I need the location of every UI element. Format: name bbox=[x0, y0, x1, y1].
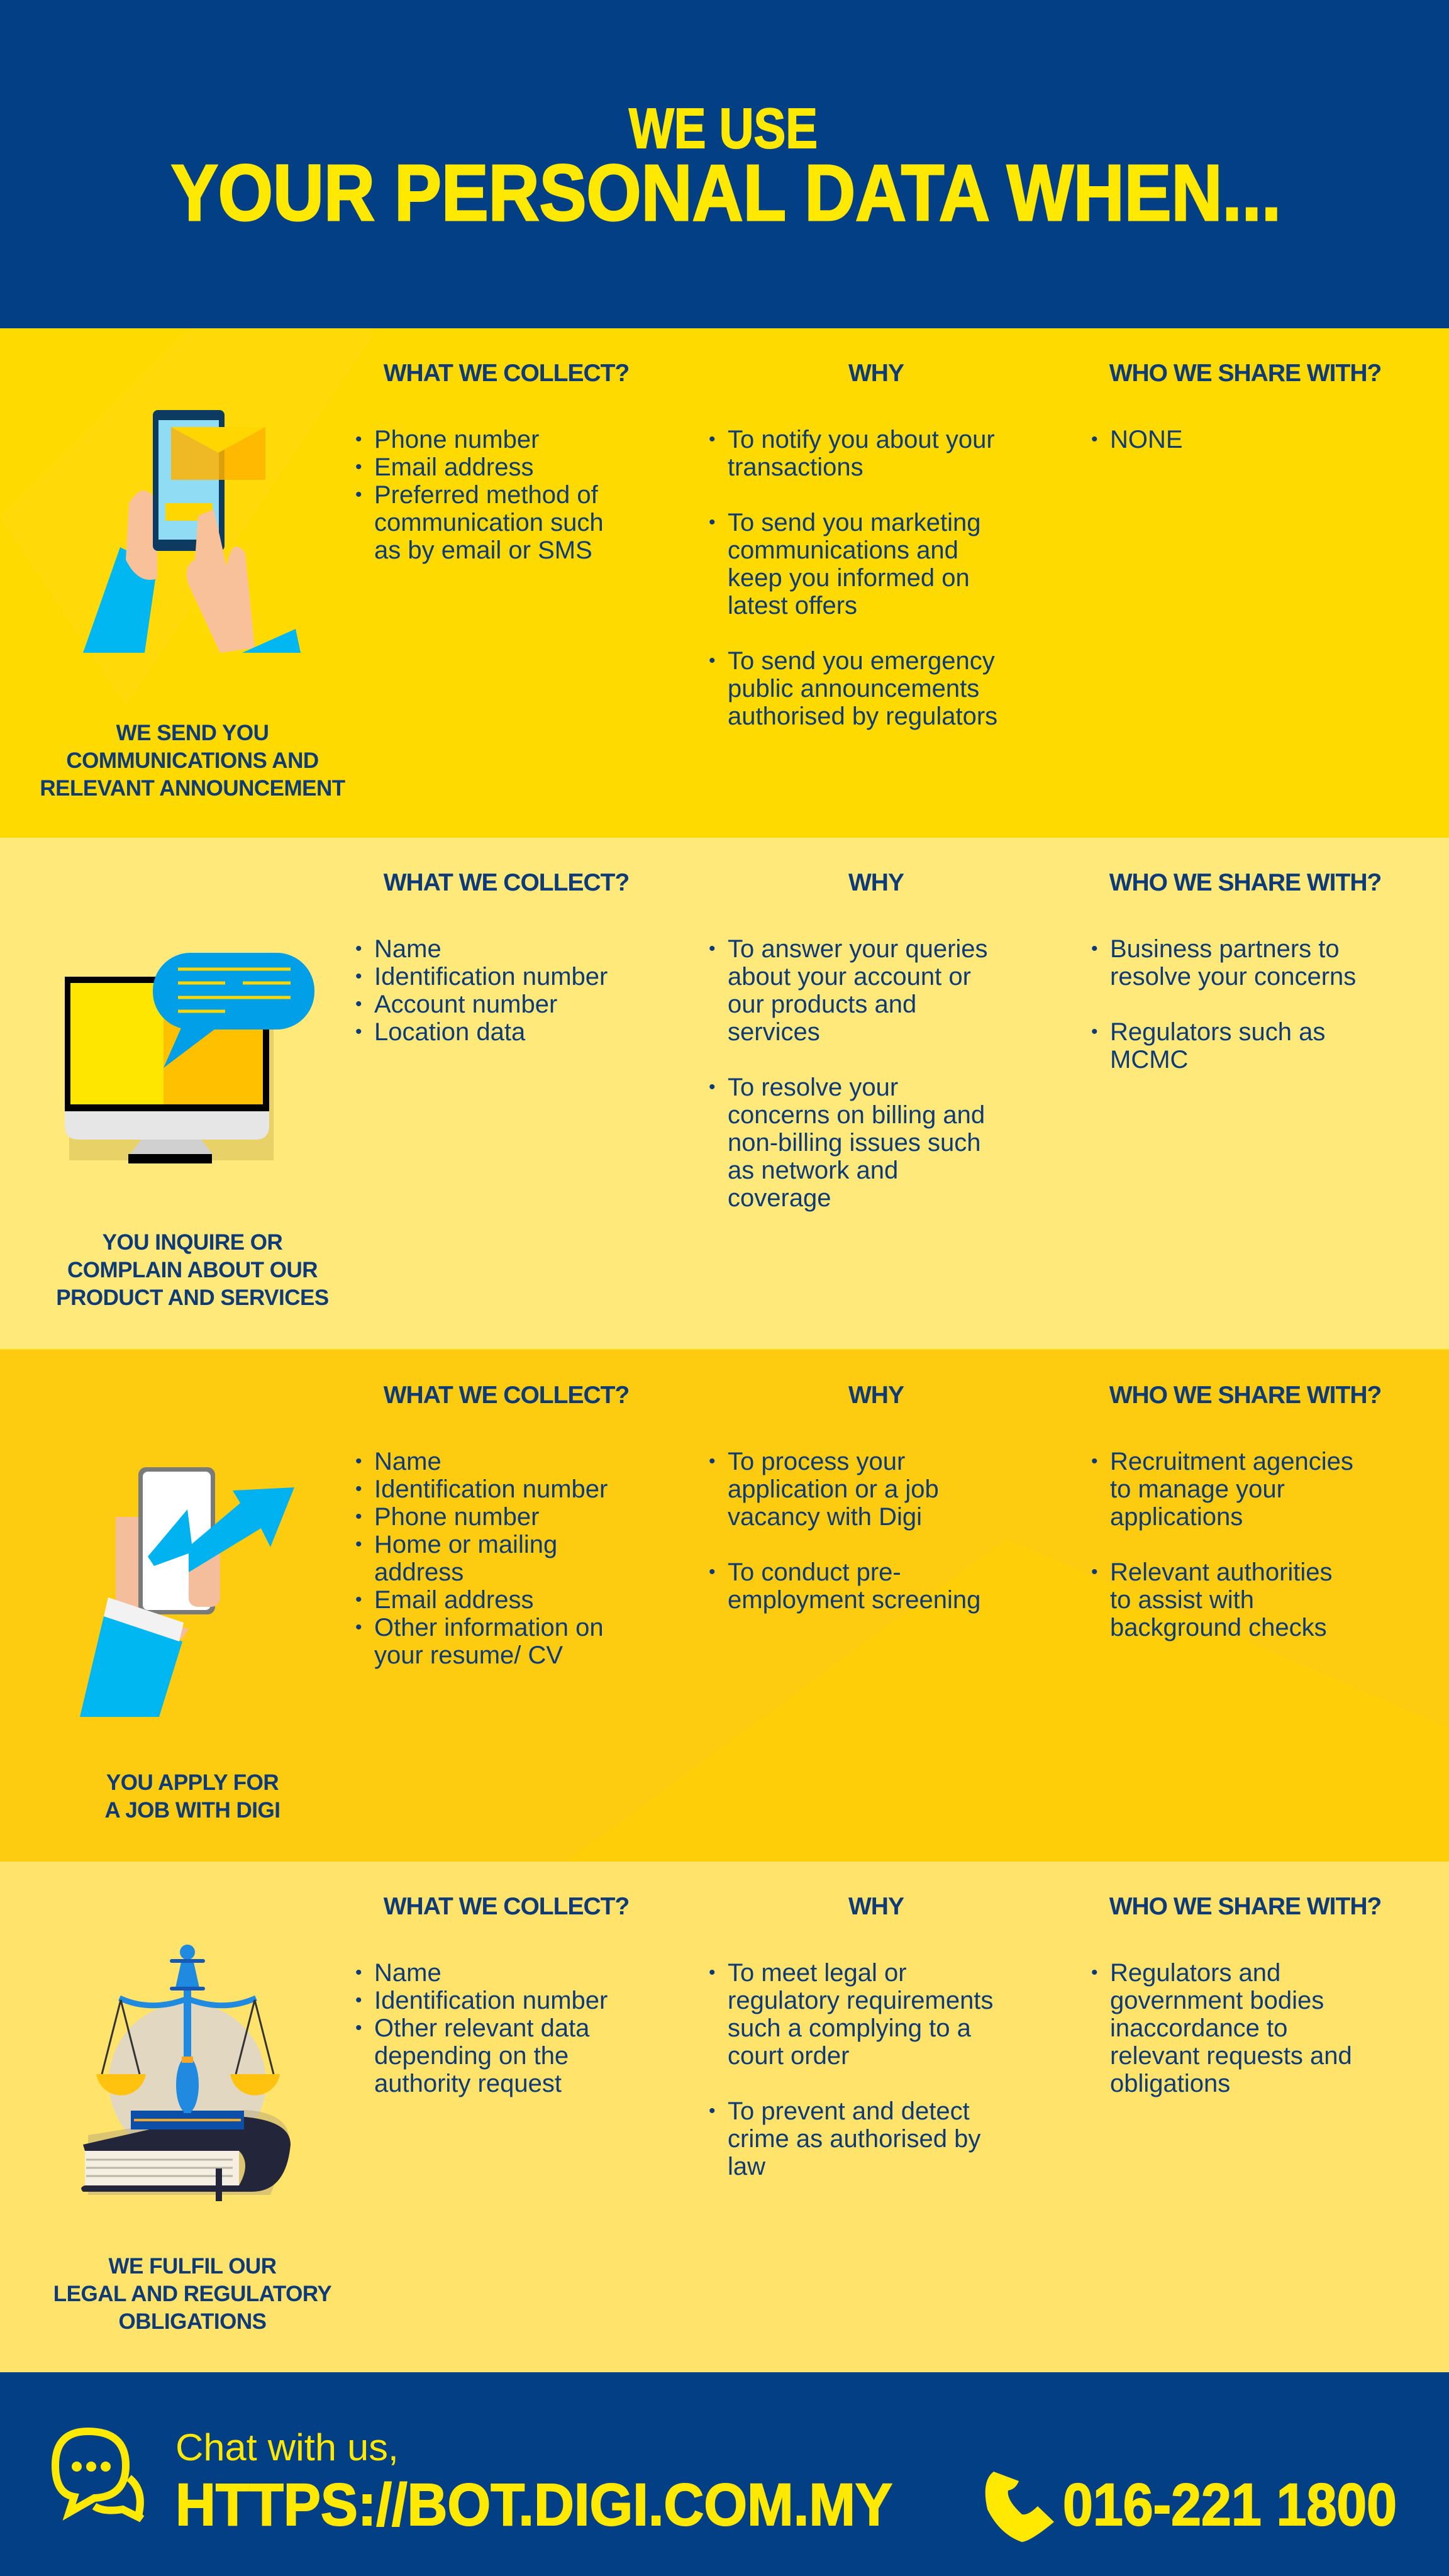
list: share: applications bbox=[1110, 1503, 1243, 1531]
list: share: to assist with bbox=[1110, 1586, 1254, 1614]
list: why: To meet legal or bbox=[728, 1959, 907, 1987]
text: url: HTTPS://BOT.DIGI.COM.MY bbox=[175, 2472, 892, 2538]
list: share: to manage your bbox=[1110, 1475, 1285, 1503]
list: why: To send you emergency bbox=[728, 647, 995, 675]
heading: who we share with: WHO WE SHARE WITH? bbox=[1109, 869, 1381, 896]
list: why: application or a job bbox=[728, 1475, 939, 1503]
list: collect: Location data bbox=[374, 1018, 525, 1046]
list: collect: authority request bbox=[374, 2070, 562, 2097]
list: collect: Phone number bbox=[374, 1503, 539, 1531]
list: why: authorised by regulators bbox=[728, 702, 997, 730]
list: share: Recruitment agencies bbox=[1110, 1448, 1353, 1475]
list: why: latest offers bbox=[728, 592, 857, 619]
list: why: To resolve your bbox=[728, 1074, 898, 1101]
list: share: obligations bbox=[1110, 2070, 1230, 2097]
panel: job application bbox=[0, 1350, 1449, 1862]
list: collect: communication such bbox=[374, 509, 604, 536]
icon: chat bubbles bbox=[55, 2431, 142, 2519]
caption bbox=[40, 721, 345, 801]
list: why: about your account or bbox=[728, 963, 971, 991]
list: collect: Identification number bbox=[374, 1475, 608, 1503]
list: collect: Email address bbox=[374, 453, 533, 481]
caption: YOU APPLY FOR bbox=[106, 1770, 279, 1795]
heading: what we collect: WHAT WE COLLECT? bbox=[384, 869, 629, 896]
caption: LEGAL AND REGULATORY bbox=[53, 2282, 331, 2306]
icon: monitor with speech bubble bbox=[65, 953, 314, 1163]
list: why: To conduct pre- bbox=[728, 1558, 901, 1586]
heading: what we collect: WHAT WE COLLECT? bbox=[384, 360, 629, 387]
caption: COMMUNICATIONS AND bbox=[66, 748, 319, 773]
list: share: government bodies bbox=[1110, 1987, 1324, 2014]
caption: OBLIGATIONS bbox=[119, 2309, 266, 2334]
list: collect: Preferred method of bbox=[374, 481, 598, 509]
caption: YOU INQUIRE OR bbox=[103, 1230, 282, 1255]
caption: PRODUCT AND SERVICES bbox=[56, 1285, 329, 1310]
heading: what we collect: WHAT WE COLLECT? bbox=[384, 1382, 629, 1409]
list: collect: Home or mailing bbox=[374, 1531, 557, 1558]
heading: who we share with: WHO WE SHARE WITH? bbox=[1109, 1382, 1381, 1409]
list: why: public announcements bbox=[728, 675, 979, 702]
list: why: our products and bbox=[728, 991, 916, 1018]
list: collect: address bbox=[374, 1558, 464, 1586]
list: why bbox=[709, 1959, 993, 2180]
panel: inquiries bbox=[0, 838, 1449, 1349]
list: collect: Other relevant data bbox=[374, 2014, 589, 2042]
list: collect: your resume/ CV bbox=[374, 1641, 563, 1669]
list: collect: Name bbox=[374, 1448, 441, 1475]
list: why: keep you informed on bbox=[728, 564, 970, 592]
panel: legal obligations bbox=[0, 1862, 1449, 2373]
list: collect: Name bbox=[374, 935, 441, 963]
list: why: crime as authorised by bbox=[728, 2125, 980, 2153]
list: why: employment screening bbox=[728, 1586, 980, 1614]
list: share bbox=[1092, 935, 1356, 1074]
list: why: as network and bbox=[728, 1157, 898, 1184]
list: share: background checks bbox=[1110, 1614, 1327, 1641]
caption bbox=[53, 2254, 332, 2334]
list: collect: depending on the bbox=[374, 2042, 569, 2070]
text: chat with us: Chat with us, bbox=[175, 2426, 399, 2468]
list: why: concerns on billing and bbox=[728, 1101, 985, 1129]
list: collect: Account number bbox=[374, 991, 557, 1018]
list: why: To send you marketing bbox=[728, 509, 980, 536]
list: why: such a complying to a bbox=[728, 2014, 971, 2042]
panel: communications bbox=[0, 328, 1449, 840]
list: why: non-billing issues such bbox=[728, 1129, 980, 1157]
caption bbox=[104, 1770, 280, 1823]
title: YOUR PERSONAL DATA WHEN... bbox=[171, 148, 1281, 237]
list: share: Business partners to bbox=[1110, 935, 1340, 963]
icon: hand with phone and arrow bbox=[80, 1467, 294, 1717]
list: why: To notify you about your bbox=[728, 426, 995, 453]
list: collect bbox=[356, 1959, 608, 2097]
list: why bbox=[709, 426, 997, 730]
list: share: relevant requests and bbox=[1110, 2042, 1352, 2070]
list: why bbox=[709, 1448, 980, 1614]
icon: phone bbox=[985, 2472, 1054, 2542]
list: share: inaccordance to bbox=[1110, 2014, 1287, 2042]
list: collect bbox=[356, 1448, 608, 1669]
heading: who we share with: WHO WE SHARE WITH? bbox=[1109, 1893, 1381, 1920]
list: collect: Phone number bbox=[374, 426, 539, 453]
list: why bbox=[709, 935, 988, 1212]
list: collect: Other information on bbox=[374, 1614, 604, 1641]
icon: scales of justice on book bbox=[81, 1945, 291, 2201]
text: phone number: 016-221 1800 bbox=[1063, 2472, 1397, 2538]
list: share: Regulators such as bbox=[1110, 1018, 1325, 1046]
list: why: To process your bbox=[728, 1448, 905, 1475]
list: why: court order bbox=[728, 2042, 849, 2070]
list: why: law bbox=[728, 2153, 765, 2180]
footer bbox=[0, 2372, 1449, 2576]
list: share: resolve your concerns bbox=[1110, 963, 1356, 991]
heading: why: WHY bbox=[848, 360, 904, 387]
heading: who we share with: WHO WE SHARE WITH? bbox=[1109, 360, 1381, 387]
list: share: Relevant authorities bbox=[1110, 1558, 1333, 1586]
list: share bbox=[1092, 1959, 1352, 2097]
list: share: NONE bbox=[1110, 426, 1183, 453]
list: why: transactions bbox=[728, 453, 863, 481]
list: share: Regulators and bbox=[1110, 1959, 1280, 1987]
list: collect: Email address bbox=[374, 1586, 533, 1614]
list: collect: Name bbox=[374, 1959, 441, 1987]
list: why: communications and bbox=[728, 536, 958, 564]
list: collect: Identification number bbox=[374, 1987, 608, 2014]
list: share: MCMC bbox=[1110, 1046, 1188, 1074]
caption bbox=[56, 1230, 329, 1310]
caption: A JOB WITH DIGI bbox=[104, 1798, 280, 1823]
caption: RELEVANT ANNOUNCEMENT bbox=[40, 776, 345, 801]
list: share bbox=[1092, 1448, 1353, 1641]
caption: WE SEND YOU bbox=[116, 721, 269, 745]
caption: WE FULFIL OUR bbox=[108, 2254, 277, 2279]
caption: COMPLAIN ABOUT OUR bbox=[67, 1258, 318, 1282]
icon: phone with hand bbox=[83, 410, 301, 653]
title: WE USE bbox=[629, 97, 818, 160]
list: why: vacancy with Digi bbox=[728, 1503, 922, 1531]
list: collect: as by email or SMS bbox=[374, 536, 592, 564]
title bbox=[171, 97, 1281, 237]
list: why: To prevent and detect bbox=[728, 2097, 970, 2125]
list: collect bbox=[356, 935, 608, 1046]
list: collect: Identification number bbox=[374, 963, 608, 991]
list: why: services bbox=[728, 1018, 820, 1046]
header banner bbox=[0, 0, 1449, 328]
list: collect bbox=[356, 426, 604, 564]
heading: why: WHY bbox=[848, 1382, 904, 1409]
heading: why: WHY bbox=[848, 869, 904, 896]
heading: what we collect: WHAT WE COLLECT? bbox=[384, 1893, 629, 1920]
heading: why: WHY bbox=[848, 1893, 904, 1920]
list: why: To answer your queries bbox=[728, 935, 988, 963]
list: why: coverage bbox=[728, 1184, 831, 1212]
list: why: regulatory requirements bbox=[728, 1987, 993, 2014]
